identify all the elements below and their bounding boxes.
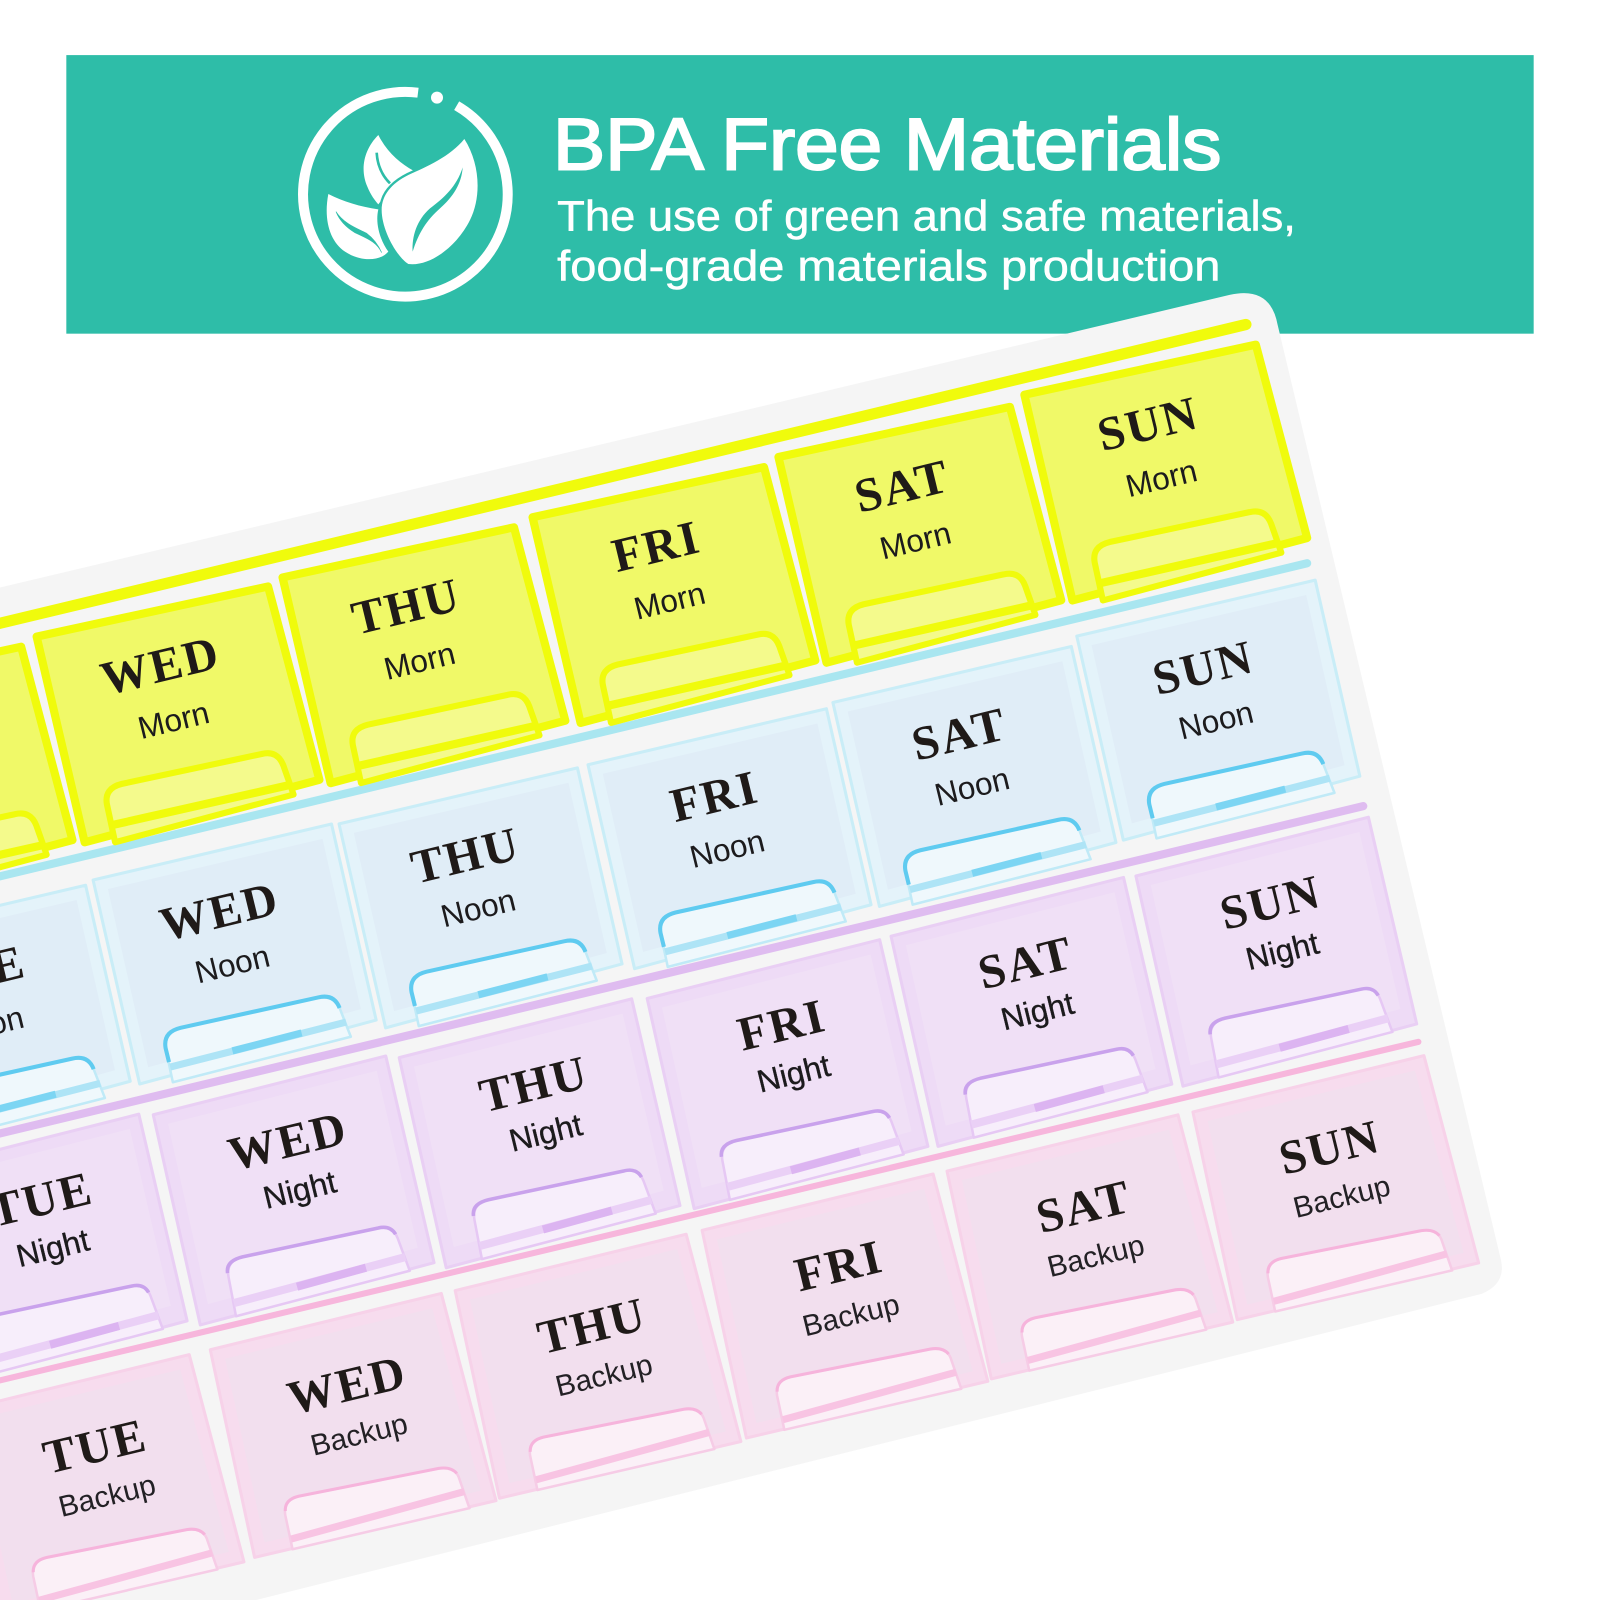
hinge strips <box>0 324 1418 1382</box>
cell: FRI Noon: Noon <box>686 822 768 875</box>
cell: FRI Night: FRI <box>732 989 831 1062</box>
cell: SUN Morn <box>1022 338 1310 607</box>
cell: SUN Noon: Noon <box>1175 694 1257 747</box>
cell: TUE Night: Night <box>13 1221 93 1274</box>
cell: FRI Backup: Backup <box>799 1288 903 1343</box>
clear tray base plate <box>0 293 1502 1600</box>
cell: WED Noon <box>90 822 382 1090</box>
cell: WED Morn <box>35 580 322 849</box>
cell: FRI Morn <box>531 460 818 730</box>
row: Morn (yellow) <box>0 338 1310 909</box>
banner background <box>66 55 1534 334</box>
cell: FRI Noon <box>585 707 877 975</box>
cell: SAT Backup <box>941 1114 1233 1382</box>
row: Night (purple) <box>0 817 1420 1383</box>
cell: WED Night: Night <box>260 1163 340 1216</box>
cell: THU Noon: Noon <box>437 881 519 934</box>
cell: SAT Backup: Backup <box>1044 1229 1148 1284</box>
cell: SUN Night <box>1131 817 1420 1086</box>
cell: SAT Morn: SAT <box>849 449 955 524</box>
cell: SAT Backup: SAT <box>1031 1170 1137 1244</box>
cell: WED Morn: WED <box>96 626 225 706</box>
cell: SUN Backup: Backup <box>1290 1169 1394 1225</box>
cell: SAT Night <box>887 877 1175 1146</box>
cell: THU Night: Night <box>505 1106 586 1159</box>
cell: TUE Backup <box>0 1354 244 1600</box>
cell: THU Morn: Morn <box>380 635 459 687</box>
cell: FRI Backup: FRI <box>790 1230 888 1302</box>
row: Noon (blue) <box>0 578 1366 1151</box>
cell: SUN Morn: SUN <box>1092 386 1204 462</box>
cell: SUN Noon: SUN <box>1147 630 1259 706</box>
cell: FRI Noon: FRI <box>665 760 764 833</box>
cell: SUN Backup <box>1187 1055 1479 1323</box>
cell: TUE Noon <box>0 883 136 1151</box>
cell: THU Backup <box>449 1233 741 1501</box>
cell: TUE Morn <box>0 640 75 909</box>
cell: FRI Backup <box>696 1173 988 1441</box>
cell: SAT Morn: Morn <box>876 514 955 566</box>
cell: SUN Backup: SUN <box>1274 1110 1386 1186</box>
cell: THU Backup: THU <box>532 1288 652 1365</box>
cell: SAT Noon <box>830 644 1122 912</box>
cell: SUN Noon <box>1074 578 1366 846</box>
cell: THU Noon <box>336 766 628 1034</box>
cell: WED Backup: Backup <box>307 1407 411 1463</box>
cell: WED Backup <box>204 1292 496 1560</box>
cell: SAT Night: Night <box>997 985 1078 1037</box>
description text <box>557 193 1296 291</box>
cell: WED Morn: Morn <box>134 694 213 746</box>
cell: THU Night: THU <box>474 1046 594 1123</box>
row: Backup (pink) <box>0 1055 1479 1600</box>
cell: FRI Morn: Morn <box>630 575 709 627</box>
cell: THU Morn <box>281 520 568 790</box>
cell: THU Morn: THU <box>347 568 466 646</box>
cell: WED Night: WED <box>223 1102 353 1182</box>
cell: TUE Backup: Backup <box>55 1468 159 1524</box>
cell: THU Noon: THU <box>406 817 525 895</box>
cell: SAT Noon: SAT <box>907 697 1012 772</box>
cell: SUN Morn: Morn <box>1122 452 1201 504</box>
pill organizer tray photo <box>0 293 1502 1600</box>
description text: The use of green and safe materials, <box>557 193 1296 241</box>
cell: SAT Night: SAT <box>973 926 1079 1000</box>
cell: WED Backup: WED <box>282 1345 412 1426</box>
cell: FRI Morn: FRI <box>607 510 706 583</box>
description text: food-grade materials production <box>557 243 1220 291</box>
cell: SUN Night: Night <box>1242 925 1323 977</box>
cell: WED Noon: Noon <box>191 938 273 990</box>
cell: WED Noon: WED <box>155 872 284 952</box>
cell: FRI Night <box>643 940 931 1209</box>
icon: leaves in circle <box>303 92 508 297</box>
cell: TUE Night <box>0 1114 190 1383</box>
cell: TUE Backup: TUE <box>38 1409 152 1485</box>
cell: SUN Night: SUN <box>1215 865 1326 941</box>
heading: BPA Free Materials <box>553 102 1221 185</box>
cell: WED Night <box>149 1056 437 1325</box>
cell: SAT Morn <box>776 400 1064 670</box>
cell: THU Night <box>395 999 683 1268</box>
cell: SAT Noon: Noon <box>931 760 1013 813</box>
cell: THU Backup: Backup <box>552 1348 656 1403</box>
cell: FRI Night: Night <box>753 1047 834 1100</box>
